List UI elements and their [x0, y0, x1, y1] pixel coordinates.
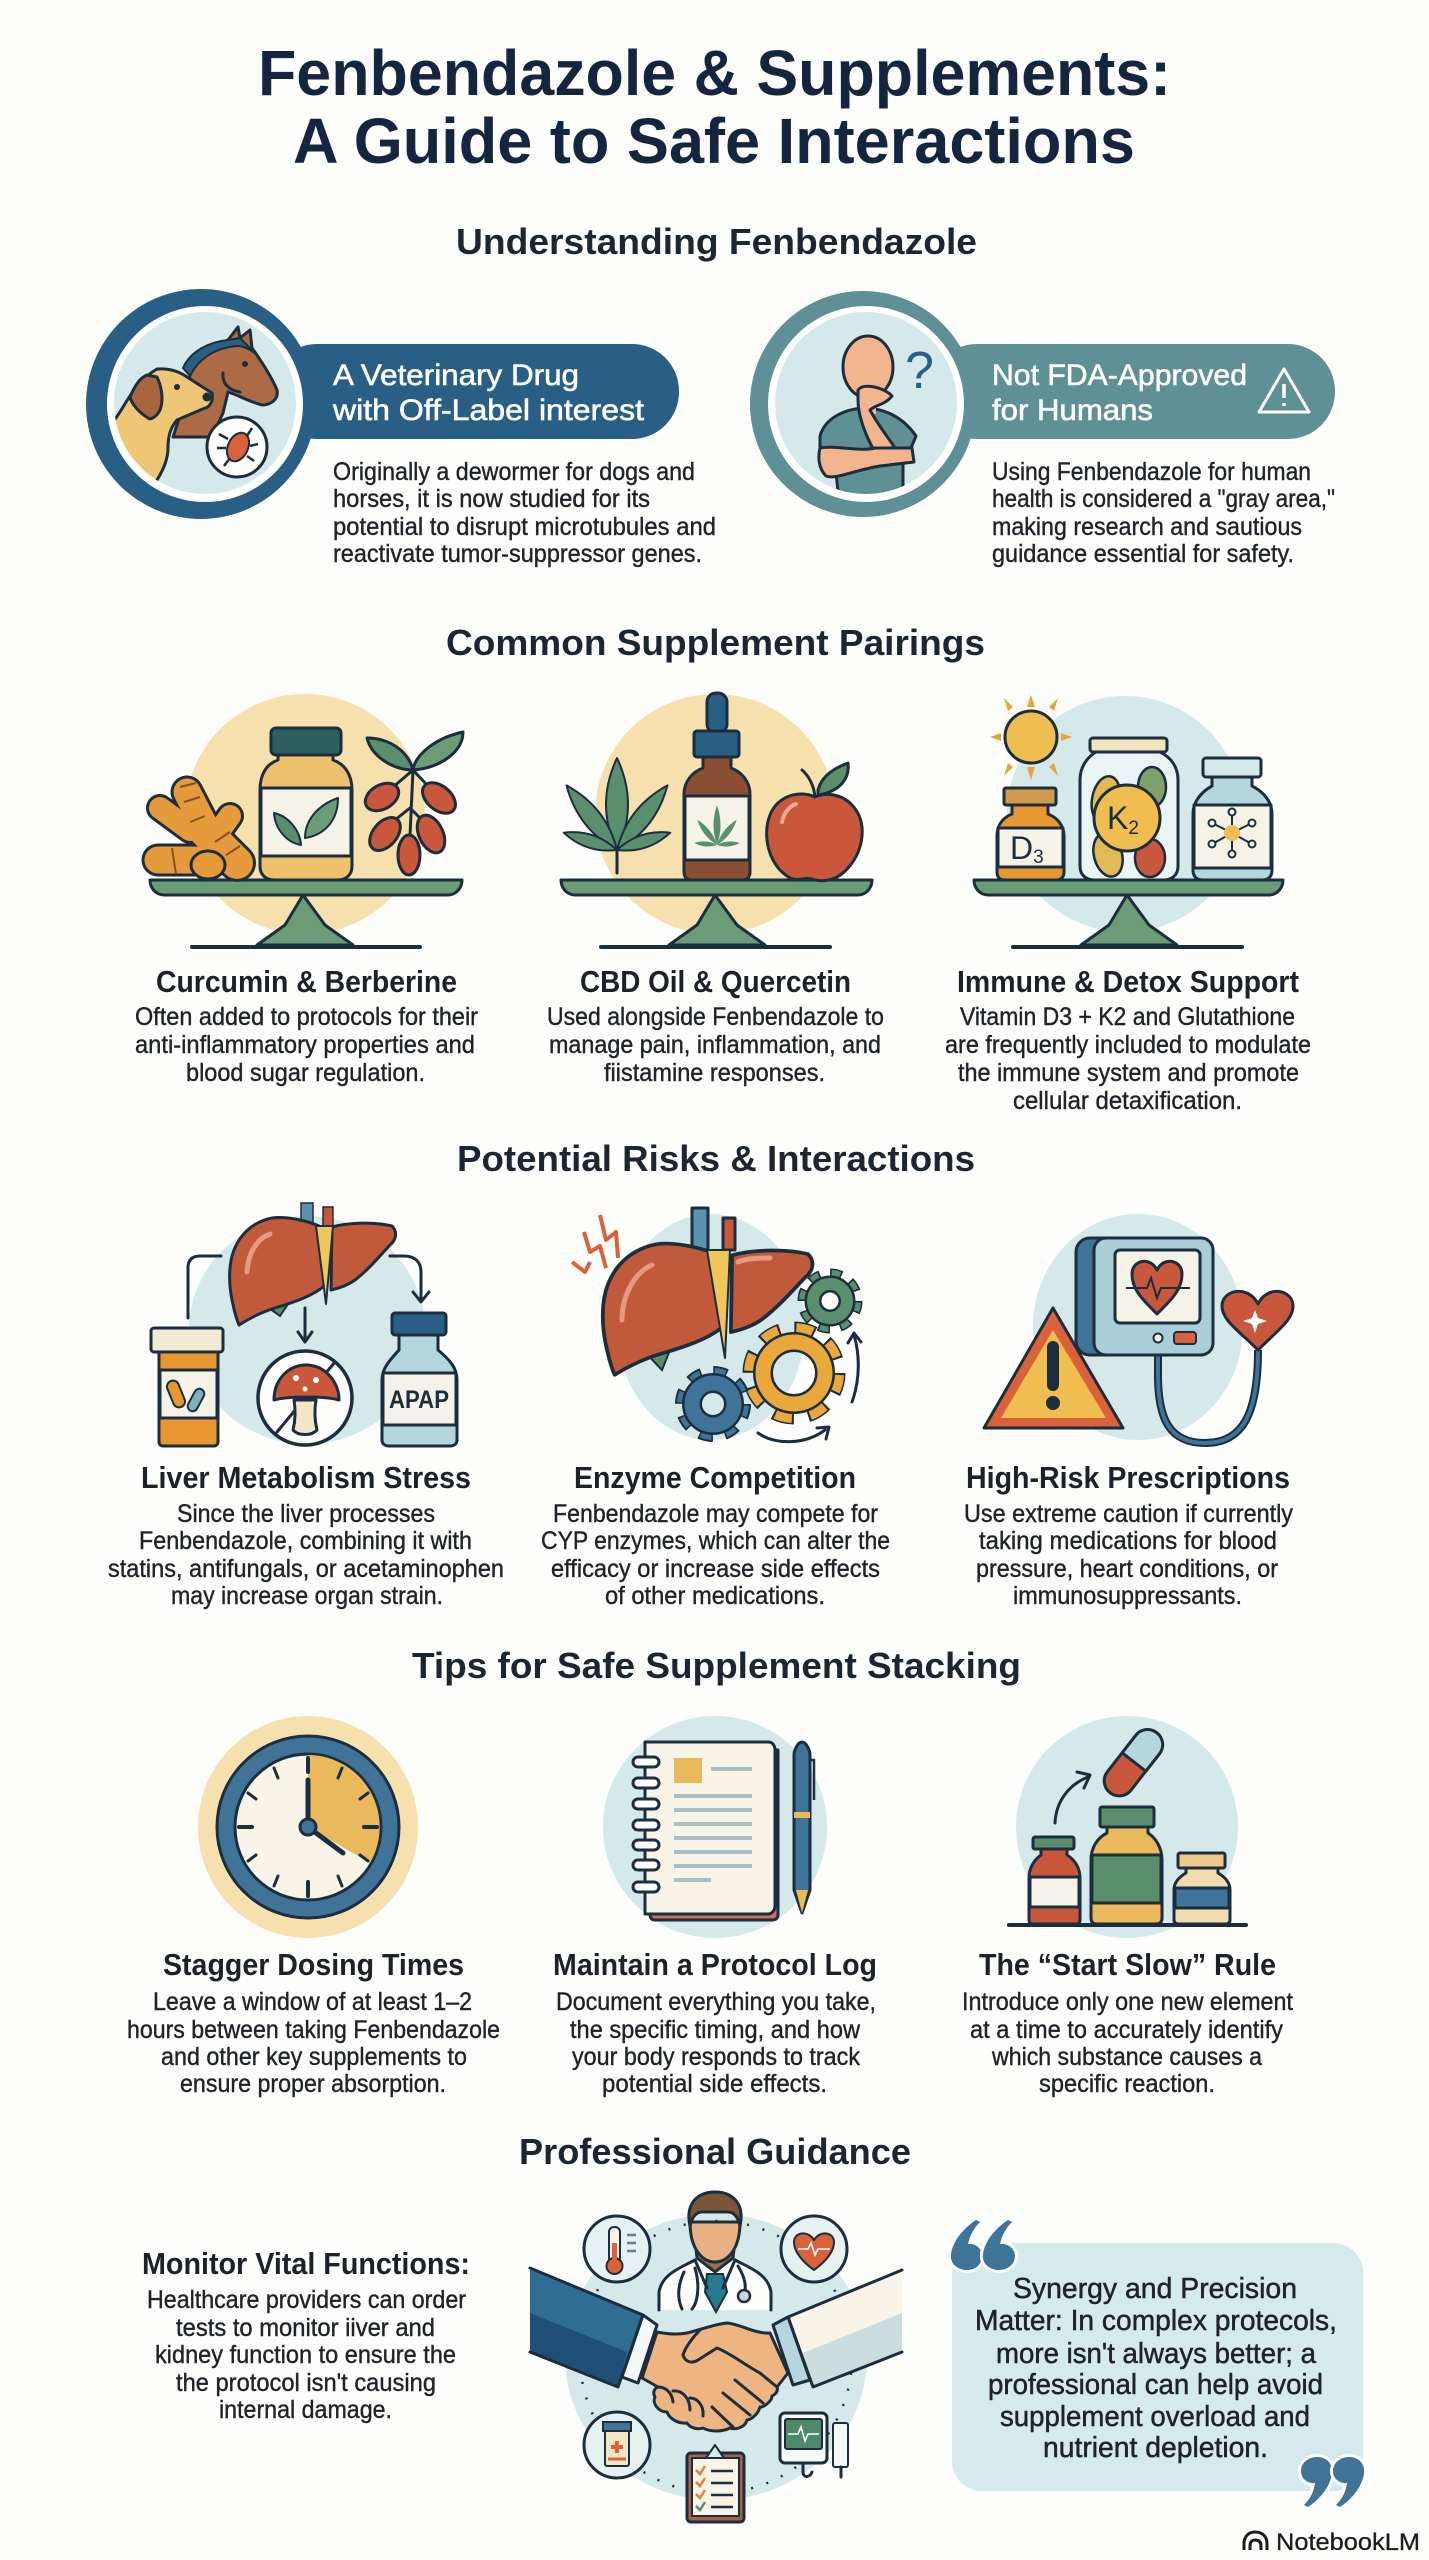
banner text [332, 359, 645, 427]
card: liver metabolism stress [108, 1203, 504, 1610]
icon: heart badge [781, 2216, 847, 2282]
icon: opening quotation mark [951, 2220, 1015, 2270]
icon: three bottles and rising capsule [1009, 1716, 1246, 1938]
icon: clipboard checklist [687, 2445, 744, 2522]
icon: thinking person: ? [905, 342, 934, 400]
icon: vitals monitor [780, 2413, 848, 2477]
quote text: nutrient depletion. [1043, 2432, 1268, 2464]
description: Leave a window of at least 1–2 [153, 1988, 472, 2016]
banner text: A Veterinary Drug [333, 359, 579, 392]
card: maintain a protocol log [553, 1716, 877, 2098]
icon: liver with gears [572, 1208, 861, 1442]
card: curcumin and berberine [135, 694, 478, 1087]
description [962, 1988, 1293, 2098]
description [992, 458, 1335, 568]
icon: medicine bottle badge [584, 2412, 650, 2478]
description: Fenbendazole may compete for [553, 1500, 878, 1528]
panel: monitor vital functions [142, 2246, 470, 2424]
icon: D3 bottle, K2 jar, glutathione bottle, sun on a scale: 2 [1128, 818, 1139, 839]
card: high-risk prescriptions [964, 1214, 1293, 1610]
description: guidance essential for safety. [992, 540, 1294, 568]
banner text: Not FDA-Approved [992, 359, 1247, 392]
description: pressure, heart conditions, or [976, 1555, 1278, 1583]
description: which substance causes a [991, 2043, 1262, 2071]
description: Often added to protocols for their [135, 1003, 478, 1031]
description: at a time to accurately identify [970, 2016, 1283, 2044]
description: Use extreme caution if currently [964, 1500, 1293, 1528]
banner pill [930, 344, 1335, 439]
banner text [992, 359, 1247, 427]
description: taking medications for blood [979, 1527, 1277, 1555]
banner pill [270, 344, 679, 439]
description: hours between taking Fenbendazole [127, 2016, 500, 2044]
quote text: supplement overload and [1000, 2401, 1310, 2433]
description [333, 458, 716, 568]
description [556, 1988, 876, 2098]
heading: Maintain a Protocol Log [553, 1947, 877, 1982]
quote text: Synergy and Precision [1013, 2273, 1297, 2305]
icon: D3 bottle, K2 jar, glutathione bottle, sun on a scale: D [1010, 830, 1033, 866]
card: the start slow rule [962, 1716, 1293, 2098]
title [258, 37, 1171, 177]
description: Originally a dewormer for dogs and [333, 458, 695, 486]
description: Since the liver processes [177, 1500, 435, 1528]
quote text: professional can help avoid [988, 2369, 1323, 2401]
banner text: for Humans [992, 394, 1153, 427]
icon: thinking person [750, 291, 976, 517]
icon: left sleeve [530, 2268, 657, 2387]
description: Fenbendazole, combining it with [139, 1527, 472, 1555]
description [964, 1500, 1293, 1610]
heading: Potential Risks & Interactions [457, 1138, 975, 1179]
description: kidney function to ensure the [155, 2341, 456, 2369]
heading: CBD Oil & Quercetin [580, 964, 851, 999]
description: may increase organ strain. [171, 1582, 443, 1610]
heading: High-Risk Prescriptions [966, 1460, 1290, 1495]
description: specific reaction. [1039, 2070, 1215, 2098]
description [945, 1003, 1311, 1115]
card: CBD oil and quercetin [547, 693, 884, 1087]
description: horses, it is now studied for its [333, 485, 650, 513]
panel: not FDA approved [750, 291, 1335, 568]
section: potential risks and interactions [108, 1138, 1293, 1610]
heading: Immune & Detox Support [957, 964, 1299, 999]
quote text [975, 2273, 1337, 2464]
card: stagger dosing times [127, 1716, 500, 2098]
description: fiistamine responses. [604, 1059, 825, 1087]
description: Using Fenbendazole for human [992, 458, 1311, 486]
description [127, 1988, 500, 2098]
section: common supplement pairings [135, 622, 1311, 1115]
description: Healthcare providers can order [147, 2286, 466, 2314]
description [547, 1003, 884, 1087]
icon: curcumin jar, turmeric, berries on a scale [150, 694, 463, 947]
icon: D3 bottle, K2 jar, glutathione bottle, sun on a scale: K [1107, 800, 1128, 836]
description: anti-inflammatory properties and [135, 1031, 475, 1059]
description: cellular detaxification. [1013, 1087, 1242, 1115]
quote text: Matter: In complex protecols, [975, 2305, 1337, 2337]
icon: right sleeve [773, 2270, 902, 2387]
description: potential to disrupt microtubules and [333, 513, 716, 541]
description: potential side effects. [602, 2070, 827, 2098]
description: tests to monitor iiver and [176, 2314, 435, 2342]
description: the protocol isn't causing [176, 2369, 436, 2397]
card: immune and detox support [945, 695, 1311, 1115]
description: CYP enzymes, which can alter the [541, 1527, 890, 1555]
icon: CBD dropper, cannabis leaf, apple on a scale [559, 693, 872, 947]
description: of other medications. [605, 1582, 825, 1610]
panel: veterinary drug [86, 289, 716, 568]
section: understanding fenbendazole [86, 221, 1335, 568]
description: reactivate tumor-suppressor genes. [333, 540, 702, 568]
description [108, 1500, 504, 1610]
icon: closing quotation mark [1301, 2457, 1364, 2507]
description [147, 2286, 466, 2424]
description: internal damage. [219, 2396, 392, 2424]
icon: D3 bottle, K2 jar, glutathione bottle, sun on a scale [974, 695, 1283, 947]
description: and other key supplements to [161, 2043, 467, 2071]
description: blood sugar regulation. [186, 1059, 425, 1087]
icon: warning triangle, blood pressure monitor and heart [984, 1214, 1293, 1443]
quote text: more isn't always better; a [996, 2338, 1317, 2370]
icon: liver with pill bottle, no-mushroom sign and APAP bottle: APAP [389, 1386, 449, 1414]
icon: warning triangle [1259, 369, 1309, 412]
description: efficacy or increase side effects [551, 1555, 880, 1583]
quote box [952, 2243, 1363, 2491]
icon: D3 bottle, K2 jar, glutathione bottle, sun on a scale: 3 [1033, 847, 1044, 868]
heading: Professional Guidance [519, 2131, 911, 2172]
description [541, 1500, 890, 1610]
title: A Guide to Safe Interactions [293, 105, 1135, 177]
heading: Understanding Fenbendazole [456, 221, 977, 262]
icon: clock [198, 1716, 418, 1938]
description: Document everything you take, [556, 1988, 876, 2016]
banner text: with Off-Label interest [332, 394, 645, 427]
description: Introduce only one new element [962, 1988, 1293, 2016]
description: making research and sautious [992, 513, 1302, 541]
description: are frequently included to modulate [945, 1031, 1311, 1059]
icon: spiral notebook and pen [603, 1716, 827, 1938]
description: immunosuppressants. [1013, 1582, 1242, 1610]
icon: liver with pill bottle, no-mushroom sign and APAP bottle [151, 1203, 457, 1446]
description: manage pain, inflammation, and [549, 1031, 881, 1059]
illustration: doctor, handshake and health icons [530, 2192, 902, 2522]
icon: thermometer badge [584, 2216, 650, 2282]
description: Vitamin D3 + K2 and Glutathione [960, 1003, 1295, 1031]
description: the specific timing, and how [570, 2016, 861, 2044]
heading: Common Supplement Pairings [446, 622, 985, 663]
description: the immune system and promote [958, 1059, 1299, 1087]
description: statins, antifungals, or acetaminophen [108, 1555, 504, 1583]
icon: dog, horse and tick [86, 289, 316, 519]
description: Used alongside Fenbendazole to [547, 1003, 884, 1031]
heading: The “Start Slow” Rule [979, 1947, 1276, 1982]
description: ensure proper absorption. [180, 2070, 446, 2098]
description [135, 1003, 478, 1087]
NotebookLM logo: NotebookLM [1276, 2529, 1420, 2556]
title: Fenbendazole & Supplements: [258, 37, 1171, 109]
heading: Monitor Vital Functions: [142, 2246, 470, 2281]
heading: Stagger Dosing Times [163, 1947, 464, 1982]
description: health is considered a "gray area," [992, 485, 1335, 513]
heading: Tips for Safe Supplement Stacking [412, 1645, 1021, 1686]
callout: synergy and precision [951, 2220, 1364, 2507]
card: enzyme competition [541, 1208, 890, 1610]
heading: Curcumin & Berberine [156, 964, 457, 999]
section: professional guidance [142, 2131, 1364, 2522]
icon: handshake [642, 2323, 788, 2431]
section: tips for safe supplement stacking [127, 1645, 1293, 2098]
description: your body responds to track [572, 2043, 860, 2071]
heading: Enzyme Competition [574, 1460, 856, 1495]
icon: doctor [658, 2192, 772, 2312]
heading: Liver Metabolism Stress [141, 1460, 471, 1495]
